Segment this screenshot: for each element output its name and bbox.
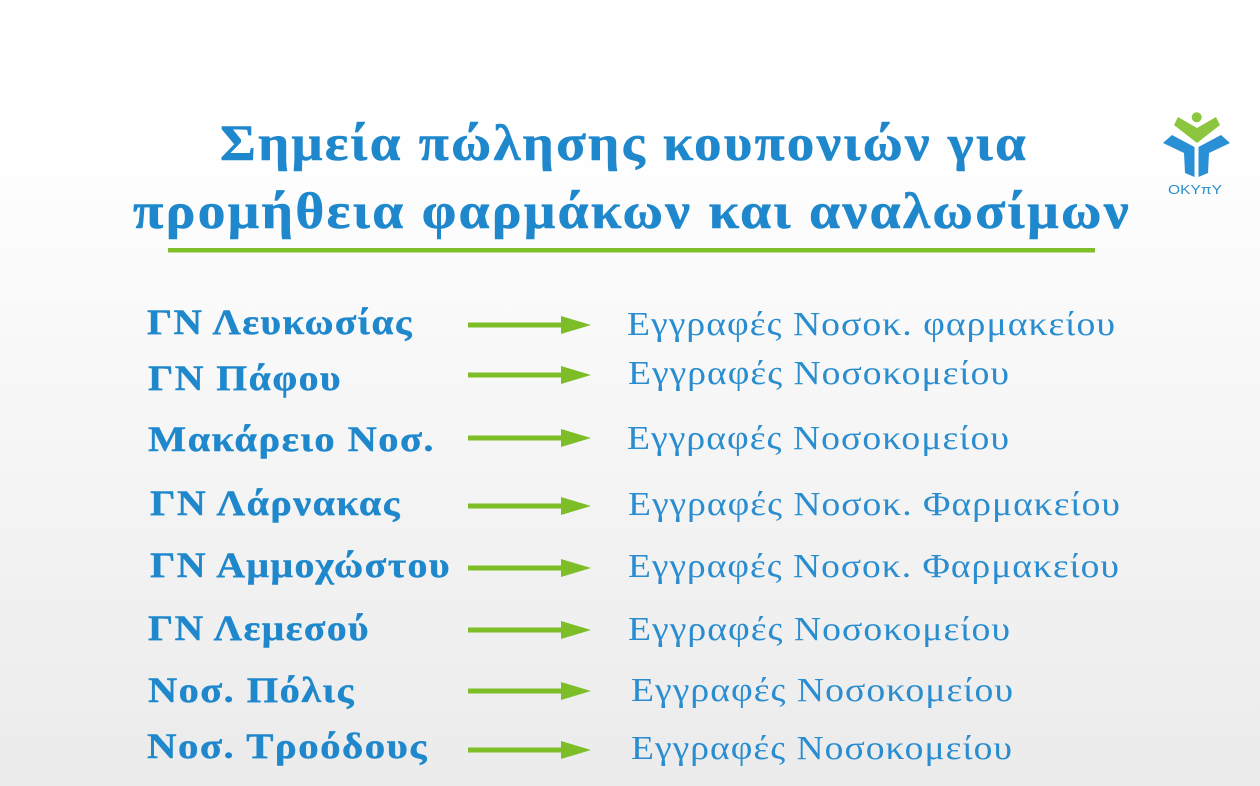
- list row: ΓΝ Λευκωσίας: [147, 302, 1116, 343]
- list row: Νοσ. Τροόδους: [147, 726, 1013, 767]
- list row: Νοσ. Τροόδους: Εγγραφές Νοσοκομείου: [631, 730, 1013, 767]
- list row: ΓΝ Λεμεσού: Εγγραφές Νοσοκομείου: [628, 611, 1011, 648]
- list row: ΓΝ Λεμεσού: [148, 608, 1011, 648]
- list row: Μακάρειο Νοσ.: Μακάρειο Νοσ.: [148, 419, 435, 459]
- title underline: [168, 248, 1095, 252]
- list row: ΓΝ Πάφου: Εγγραφές Νοσοκομείου: [628, 355, 1010, 392]
- list row: ΓΝ Λευκωσίας: Εγγραφές Νοσοκ. φαρμακείου: [627, 306, 1116, 343]
- icon: OKYπY logo: OKYπY: [1168, 182, 1222, 197]
- list row: Μακάρειο Νοσ.: Εγγραφές Νοσοκομείου: [627, 420, 1010, 457]
- list row: ΓΝ Λάρνακας: Εγγραφές Νοσοκ. Φαρμακείου: [628, 486, 1121, 523]
- list row: ΓΝ Αμμοχώστου: Εγγραφές Νοσοκ. Φαρμακείου: [628, 548, 1120, 585]
- list row: Νοσ. Τροόδους: Νοσ. Τροόδους: [147, 726, 428, 766]
- list row: ΓΝ Αμμοχώστου: ΓΝ Αμμοχώστου: [150, 545, 451, 585]
- list row: Νοσ. Πόλις: Νοσ. Πόλις: [148, 670, 355, 710]
- list row: Νοσ. Πόλις: [148, 670, 1014, 710]
- list row: ΓΝ Λάρνακας: [150, 483, 1121, 523]
- title: Σημεία πώλησης κουπονιών για: [220, 116, 1028, 172]
- title: [133, 116, 1131, 240]
- list row: ΓΝ Πάφου: [148, 355, 1010, 398]
- list row: Μακάρειο Νοσ.: [148, 419, 1010, 459]
- list row: ΓΝ Λευκωσίας: ΓΝ Λευκωσίας: [147, 302, 413, 342]
- list row: ΓΝ Αμμοχώστου: [150, 545, 1120, 585]
- title: προμήθεια φαρμάκων και αναλωσίμων: [133, 184, 1131, 240]
- list row: Νοσ. Πόλις: Εγγραφές Νοσοκομείου: [631, 672, 1014, 709]
- icon: OKYπY logo: [1163, 112, 1230, 197]
- list row: ΓΝ Λεμεσού: ΓΝ Λεμεσού: [148, 608, 370, 648]
- list row: ΓΝ Πάφου: ΓΝ Πάφου: [148, 358, 342, 398]
- list row: ΓΝ Λάρνακας: ΓΝ Λάρνακας: [150, 483, 401, 523]
